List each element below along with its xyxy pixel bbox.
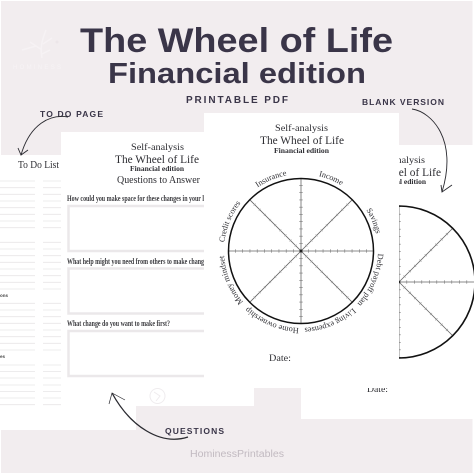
- wheel chart: [219, 170, 384, 334]
- questions page heading: [115, 142, 201, 186]
- wheel page heading: [260, 123, 344, 155]
- wheel page heading: Financial edition: [274, 146, 330, 155]
- to do lines: [0, 181, 61, 405]
- segment labels: Debt payoff plan: [357, 254, 384, 306]
- arrow: questions: [109, 393, 188, 439]
- hub: [300, 250, 302, 252]
- question 1: How could you make space for these changes in your l: [67, 194, 205, 203]
- blank page heading: The Wheel of Life: [357, 165, 441, 179]
- answer box 1: [68, 206, 258, 251]
- panel: blank version page: [301, 145, 474, 419]
- panel: wheel page: [204, 113, 399, 388]
- segment labels: [219, 170, 384, 334]
- questions page heading: Questions to Answer: [117, 175, 201, 186]
- label: to do page: TO DO PAGE: [40, 109, 103, 119]
- to do list heading: To Do List: [18, 160, 59, 171]
- blank page heading: Financial edition: [372, 177, 427, 186]
- label: printable pdf: PRINTABLE PDF: [186, 95, 288, 106]
- panel: to do list page: [0, 155, 136, 430]
- segment labels: Money mindset: [220, 256, 243, 306]
- footer credit: HominessPrintables: [190, 449, 284, 460]
- spokes: [228, 178, 374, 324]
- blank page date: Date:: [367, 385, 388, 395]
- blank page heading: Self-analysis: [372, 155, 425, 166]
- logo: Hominess: HOMINESS: [13, 65, 61, 71]
- section labels: ons: [0, 293, 8, 298]
- page logo: [150, 388, 165, 404]
- wheel page heading: Self-analysis: [275, 123, 328, 134]
- answer box 3: [68, 331, 258, 376]
- segment labels: Savings: [366, 208, 380, 234]
- blank wheel: [398, 206, 474, 358]
- segment labels: Income: [319, 170, 343, 185]
- answer box 2: [68, 268, 258, 314]
- blank page heading: [357, 155, 441, 186]
- questions page heading: Financial edition: [130, 164, 185, 173]
- segment labels: Credit scores: [219, 201, 240, 242]
- wheel page date: Date:: [269, 354, 291, 364]
- question 3: What change do you want to make first?: [67, 319, 170, 328]
- segment labels: Home ownership: [246, 307, 299, 334]
- segment labels: Insurance: [254, 172, 286, 188]
- arrow: to do page: [18, 116, 68, 155]
- title: The Wheel of Life: [80, 22, 393, 60]
- arrow: blank version: [412, 109, 452, 192]
- wheel rim: [228, 178, 374, 324]
- question 2: What help might you need from others to make chang: [67, 257, 204, 266]
- wheel page heading: The Wheel of Life: [260, 133, 344, 147]
- segment labels: Living expenses: [304, 308, 356, 332]
- panel: questions page: [61, 132, 258, 406]
- subtitle: Financial edition: [108, 58, 366, 90]
- panel: to do list page: es: [0, 354, 6, 359]
- questions page heading: Self-analysis: [131, 142, 184, 153]
- label: blank version: BLANK VERSION: [362, 97, 444, 107]
- logo: Hominess: [13, 30, 61, 71]
- label: questions: QUESTIONS: [165, 426, 224, 436]
- questions page heading: The Wheel of Life: [115, 152, 199, 166]
